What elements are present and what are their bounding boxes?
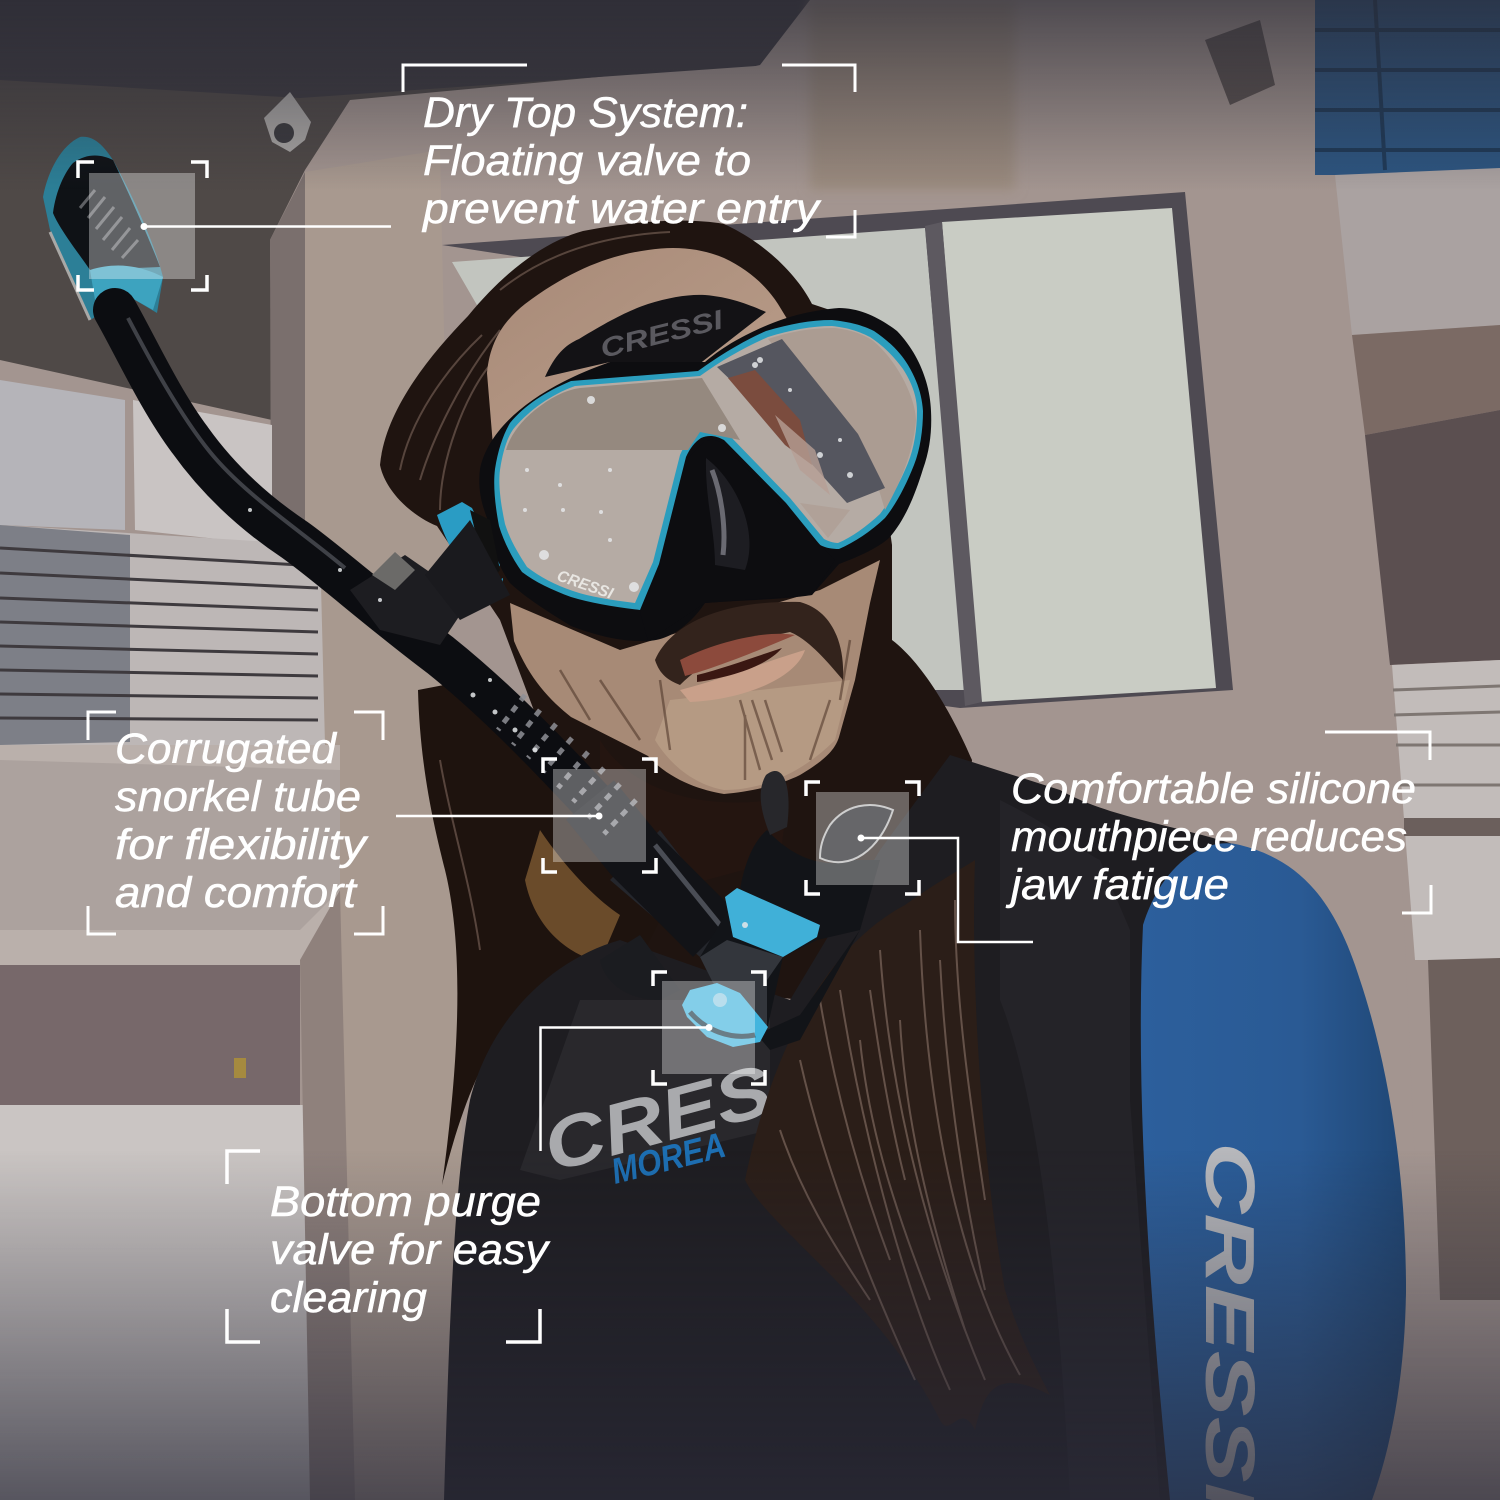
snorkel connector clip xyxy=(350,555,470,645)
callout text: Corrugated xyxy=(115,725,338,773)
wetsuit blue sleeve xyxy=(1141,843,1406,1500)
long hair over suit xyxy=(745,860,1050,1430)
chin beard xyxy=(655,680,850,790)
wetsuit xyxy=(444,755,1406,1500)
mouthpiece body xyxy=(700,830,880,1050)
snorkel collar xyxy=(600,935,680,1000)
mouthpiece blue insert xyxy=(725,888,820,957)
sleeve logo: CRESSI xyxy=(1191,1142,1269,1500)
mask buckle xyxy=(437,502,500,592)
chest model name: MOREA xyxy=(607,1124,729,1192)
diver hair left strand xyxy=(418,680,680,1185)
callout frame xyxy=(403,65,855,237)
diving mask xyxy=(437,295,931,641)
chest logo: CRES xyxy=(535,1050,780,1187)
mask strap xyxy=(545,295,766,377)
marker: mouthpiece xyxy=(806,782,1033,942)
callout text: and comfort xyxy=(115,869,358,917)
callout text: Comfortable silicone xyxy=(1011,765,1416,813)
mask lens xyxy=(499,326,917,603)
callout: corrugated tube xyxy=(88,712,383,934)
callout: silicone mouthpiece xyxy=(1006,732,1431,913)
marker: corrugated tube xyxy=(396,759,656,872)
lower beard xyxy=(600,740,790,890)
snorkel tube xyxy=(115,310,600,810)
diver hair upper xyxy=(380,221,972,1185)
callout frame xyxy=(88,712,383,934)
callout text: prevent water entry xyxy=(421,185,822,233)
security camera xyxy=(264,92,311,152)
callout text: snorkel tube xyxy=(115,773,361,821)
snorkel dry top xyxy=(43,137,163,320)
window xyxy=(442,192,1233,708)
callout text: mouthpiece reduces xyxy=(1011,813,1407,861)
callout text: Bottom purge xyxy=(270,1178,541,1226)
mask marking: CRESSI xyxy=(555,568,616,603)
water droplets xyxy=(248,357,853,1007)
purge valve xyxy=(682,983,768,1047)
lips xyxy=(680,650,805,702)
face xyxy=(487,248,880,890)
callout text: Dry Top System: xyxy=(423,89,748,137)
callout frame xyxy=(1325,732,1431,913)
diving mask: CRESSI xyxy=(597,304,726,364)
nose pocket xyxy=(640,440,835,641)
snorkel lower tube xyxy=(610,830,727,957)
callout text: jaw fatigue xyxy=(1006,861,1229,909)
marker: purge valve xyxy=(540,972,765,1151)
callout: dry top system xyxy=(403,65,855,237)
corrugated section xyxy=(498,695,636,834)
lens reflected stripe xyxy=(717,339,885,503)
callout text: Floating valve to xyxy=(423,137,751,185)
silicone bite piece xyxy=(820,805,893,862)
hourglass section xyxy=(700,940,783,1027)
mustache xyxy=(655,602,843,685)
snorkel xyxy=(43,137,893,1050)
mask frame xyxy=(479,308,931,641)
callout text: for flexibility xyxy=(115,821,369,869)
marker: dry top xyxy=(78,162,391,290)
callout frame xyxy=(227,1151,540,1342)
callout text: valve for easy xyxy=(270,1226,551,1274)
callout: bottom purge valve xyxy=(227,1151,551,1342)
lens upper shadow band xyxy=(506,378,740,450)
mask blue rim xyxy=(494,320,923,610)
callout text: clearing xyxy=(270,1274,427,1322)
lens right shade xyxy=(768,328,916,510)
